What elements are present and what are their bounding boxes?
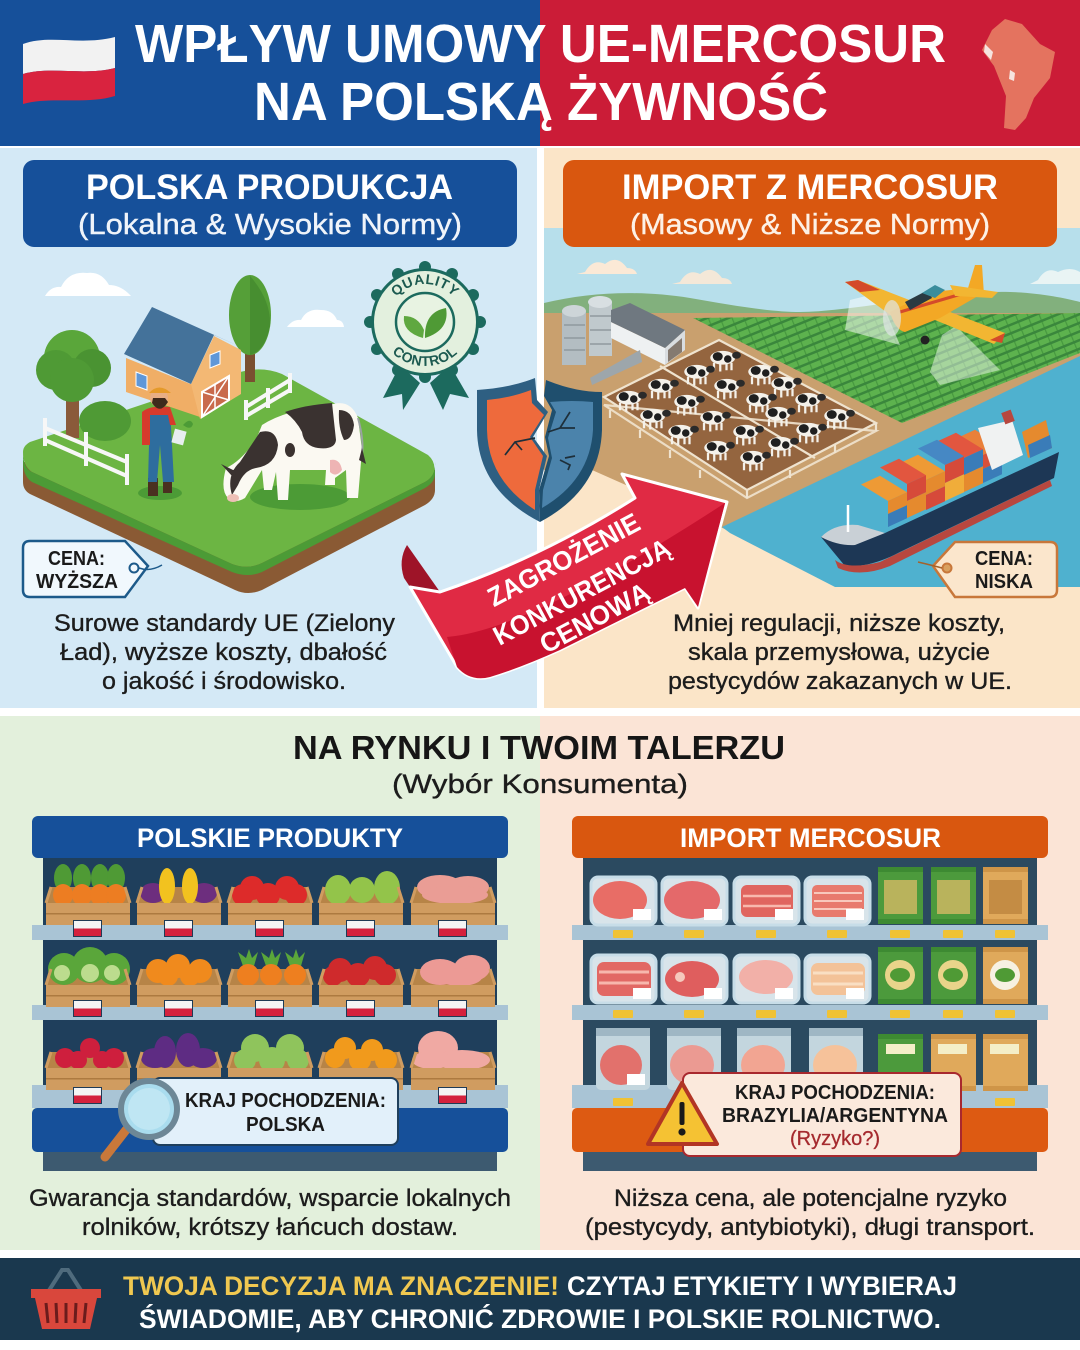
footer banner: TWOJA DECYZJA MA ZNACZENIE! (123, 1271, 559, 1301)
arrow label: KONKURENCJĄ (488, 533, 675, 651)
price tag: higher: WYŻSZA (36, 570, 118, 593)
icon: shopping basket (31, 1270, 101, 1329)
footer banner: CZYTAJ ETYKIETY I WYBIERAJ (567, 1271, 957, 1301)
quality control badge: CONTROL (394, 347, 458, 366)
meat trays row 2 (591, 955, 870, 1003)
panel: Polish production background (0, 148, 537, 708)
icon: magnifying glass (105, 1081, 177, 1157)
shelf header: IMPORT MERCOSUR (680, 823, 941, 853)
description: Polish production (54, 610, 395, 695)
section heading (293, 729, 785, 799)
market shelf: Mercosur import (572, 816, 1048, 1171)
right heading box: IMPORT Z MERCOSUR (622, 168, 998, 207)
meat trays row 1 (591, 877, 870, 925)
price tag: low (918, 542, 1057, 597)
icon: South America map (982, 19, 1055, 130)
quality control badge: QUALITY (392, 274, 460, 295)
callout: origin Brazil/Argentina (683, 1073, 961, 1156)
panel: consumer choice left background (0, 716, 540, 1250)
icon: warning triangle (648, 1083, 717, 1144)
shelf header: POLSKIE PRODUKTY (137, 823, 403, 853)
price tag: low: CENA: (975, 548, 1033, 570)
yellow price tags (613, 930, 1015, 1106)
produce crates row 3 (46, 1031, 495, 1090)
industrial farm with silos (562, 296, 685, 385)
text: Polish products benefits (29, 1185, 511, 1241)
description: Mercosur import (668, 610, 1012, 695)
market shelf: Polish products (32, 816, 508, 1171)
icon: dairy cow (221, 403, 366, 510)
produce crates row 2 (46, 947, 495, 1007)
shelf header (32, 816, 508, 858)
description: Mercosur import: skala przemysłowa, użycie (688, 639, 990, 666)
icon: farmer (138, 388, 193, 500)
icon: Polish flag (23, 37, 115, 104)
text: Polish products benefits: Gwarancja standardów, wsparcie lokalnych (29, 1185, 511, 1212)
icon: left tree (36, 330, 131, 441)
icon: fences (45, 373, 290, 485)
quality control badge (364, 261, 486, 410)
text: Polish products benefits: rolników, krótszy łańcuch dostaw. (82, 1214, 458, 1241)
callout: origin Brazil/Argentina: (Ryzyko?) (790, 1128, 880, 1150)
description: Polish production: o jakość i środowisko. (102, 668, 346, 695)
left heading box: POLSKA PRODUKCJA (86, 168, 453, 207)
arrow label: ZAGROŻENIE (483, 507, 645, 613)
panel: Mercosur import background (544, 148, 1080, 708)
text: import risks (585, 1185, 1035, 1241)
price tag: higher (23, 541, 162, 597)
arrow label: CENOWĄ (535, 577, 655, 659)
title: NA POLSKĄ ŻYWNOŚĆ (254, 72, 828, 132)
container stacks (861, 430, 1002, 527)
panel: consumer choice right background (540, 716, 1080, 1250)
text: import risks: Niższa cena, ale potencjalne ryzyko (614, 1185, 1007, 1212)
left heading box (23, 160, 517, 247)
footer banner: ŚWIADOMIE, ABY CHRONIĆ ZDROWIE I POLSKIE ROLNICTWO. (139, 1303, 941, 1334)
shelf header (572, 816, 1048, 858)
text: import risks: (pestycydy, antybiotyki), długi transport. (585, 1214, 1035, 1241)
callout: origin Brazil/Argentina: BRAZYLIA/ARGENTYNA (722, 1105, 948, 1127)
arrow: price competition threat (402, 474, 727, 678)
callout: origin Poland: KRAJ POCHODZENIA: (185, 1090, 386, 1112)
description: Mercosur import: pestycydów zakazanych w UE. (668, 668, 1012, 695)
description: Polish production: Ład), wyższe koszty, dbałość (60, 639, 387, 666)
container ship (821, 410, 1059, 573)
clouds (45, 273, 344, 327)
footer banner (0, 1258, 1080, 1340)
farm island illustration (23, 275, 435, 593)
produce crates row 1 (46, 864, 495, 925)
right heading box (563, 160, 1057, 247)
section heading: (Wybór Konsumenta) (392, 769, 688, 799)
Polish flag labels (73, 920, 467, 1104)
cattle feedlot (604, 340, 876, 498)
icon: tall tree (229, 275, 271, 382)
icon: farmhouse (124, 307, 241, 419)
crop-dusting plane with spray (845, 265, 1005, 385)
header band (0, 0, 1080, 146)
title: WPŁYW UMOWY UE-MERCOSUR (135, 14, 946, 74)
title (135, 14, 946, 132)
vacuum bags row 3 (596, 1028, 863, 1090)
price tag: low: NISKA (975, 571, 1033, 593)
callout: origin Brazil/Argentina: KRAJ POCHODZENIA: (735, 1082, 935, 1104)
description: Polish production: Surowe standardy UE (Zielony (54, 610, 395, 637)
callout: origin Poland (153, 1078, 398, 1145)
description: Mercosur import: Mniej regulacji, niższe koszty, (673, 610, 1005, 637)
price tag: higher: CENA: (48, 548, 105, 570)
section heading: NA RYNKU I TWOIM TALERZU (293, 729, 785, 766)
grain bags (878, 867, 1028, 1091)
right heading box: (Masowy & Niższe Normy) (630, 209, 990, 241)
callout: origin Poland: POLSKA (246, 1114, 325, 1136)
broken shield (477, 378, 602, 522)
left heading box: (Lokalna & Wysokie Normy) (78, 209, 462, 241)
